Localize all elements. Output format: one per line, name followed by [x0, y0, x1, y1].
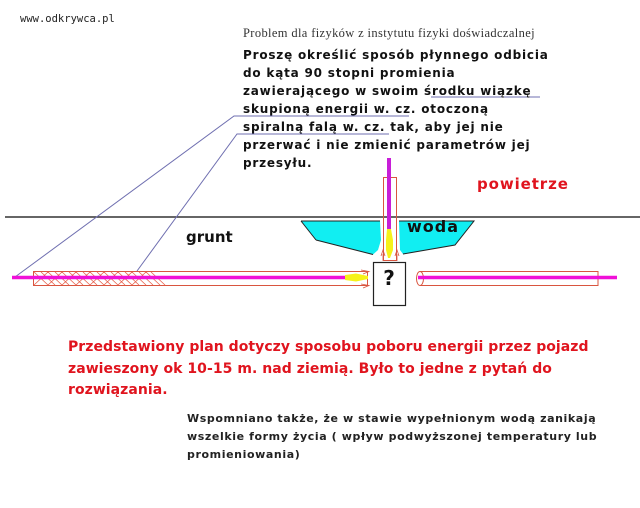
- note text: [187, 412, 597, 461]
- right waveguide: [416, 272, 617, 286]
- label: powietrze: powietrze: [477, 175, 569, 193]
- note text: Wspomniano także, że w stawie wypełnionym wodą zanikają: [187, 412, 596, 425]
- heading: Problem dla fizyków z instytutu fizyki doświadczalnej: [243, 26, 535, 40]
- callout lines to text: [15, 97, 540, 277]
- question text: [243, 48, 549, 170]
- red description: Przedstawiony plan dotyczy sposobu poboru energii przez pojazd: [68, 339, 589, 355]
- note text: wszelkie formy życia ( wpływ podwyższonej temperatury lub: [187, 430, 597, 443]
- vertical waveguide: [381, 158, 399, 261]
- label: grunt: grunt: [186, 228, 233, 246]
- water pond: [301, 221, 474, 254]
- red description: zawieszony ok 10-15 m. nad ziemią. Było to jedne z pytań do: [68, 360, 552, 376]
- question text: spiralną falą w. cz. tak, aby jej nie: [243, 120, 504, 134]
- note text: promieniowania): [187, 448, 300, 461]
- label: woda: woda: [407, 217, 459, 236]
- unknown element box: [374, 262, 406, 306]
- question text: przerwać i nie zmienić parametrów jej: [243, 138, 530, 152]
- red description: rozwiązania.: [68, 382, 168, 398]
- question text: zawierającego w swoim środku wiązkę: [243, 84, 531, 98]
- left waveguide with spiral hatch: [12, 270, 369, 288]
- question text: przesyłu.: [243, 156, 312, 170]
- red description: [68, 339, 589, 398]
- question text: do kąta 90 stopni promienia: [243, 66, 455, 80]
- ground line: [5, 216, 640, 218]
- source url: www.odkrywca.pl: [20, 13, 115, 25]
- question text: Proszę określić sposób płynnego odbicia: [243, 48, 549, 62]
- question text: skupioną energii w. cz. otoczoną: [243, 102, 489, 116]
- unknown element box: ?: [383, 266, 395, 290]
